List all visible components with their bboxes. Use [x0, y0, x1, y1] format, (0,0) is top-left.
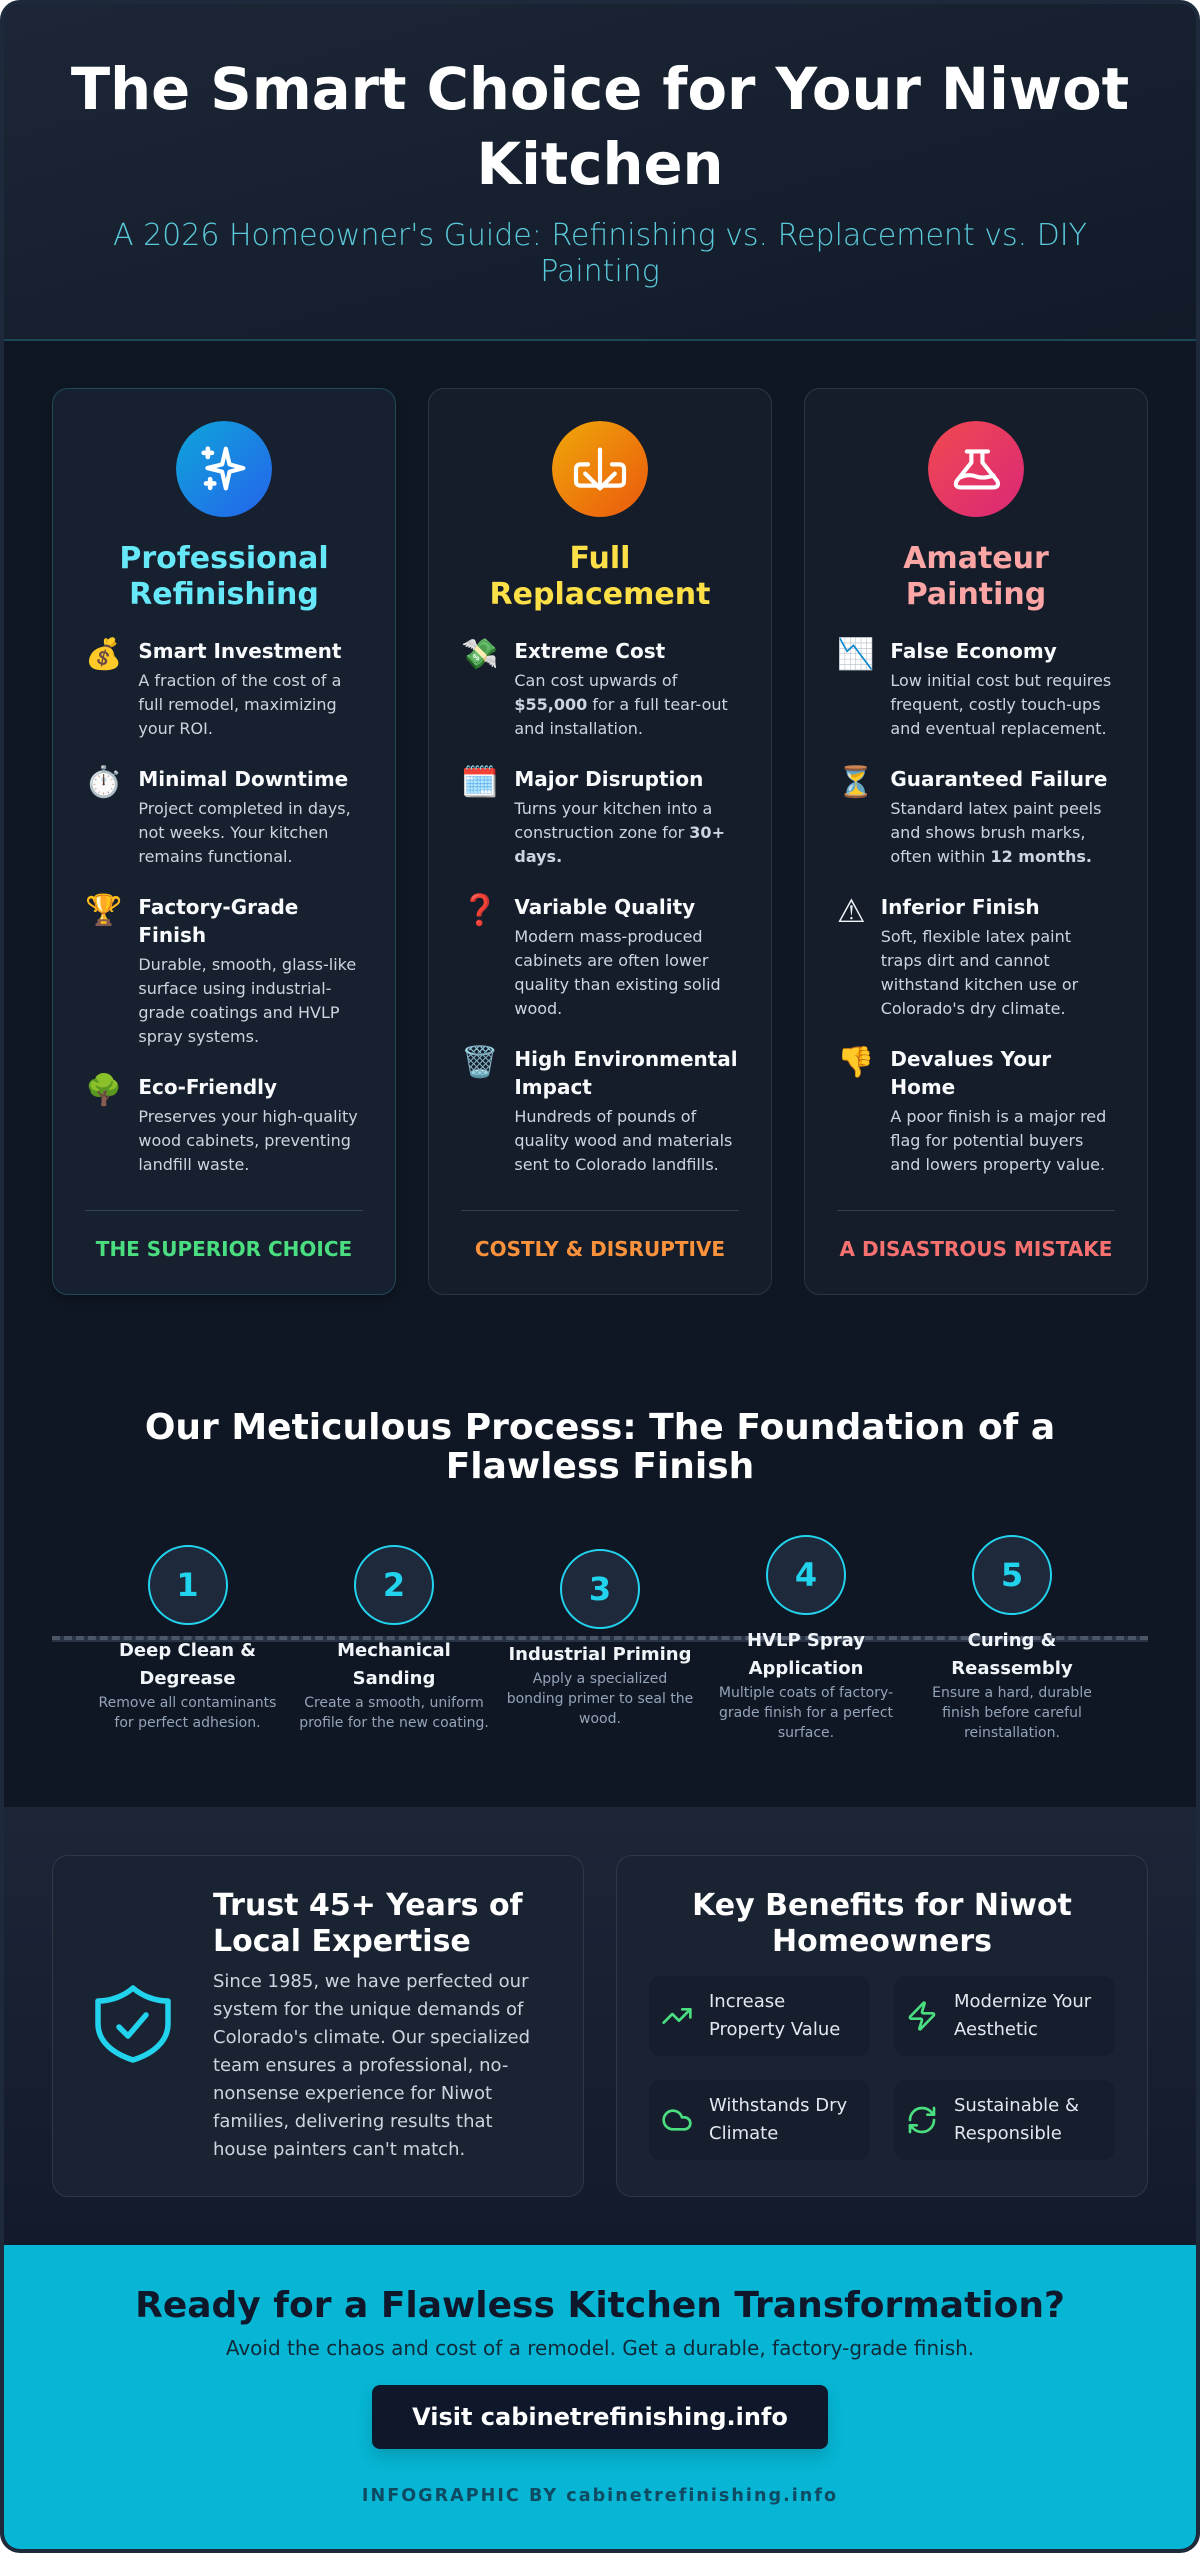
card title: Professional: [119, 541, 329, 576]
card title: Amateur: [903, 541, 1049, 576]
item: false economy: False Economy: [890, 639, 1057, 663]
item: extreme cost: and installation.: [514, 719, 643, 738]
verdict: [461, 1210, 739, 1264]
step text: [507, 1671, 693, 1727]
step number: [766, 1535, 846, 1615]
item: minimal downtime: not weeks. Your kitchen: [138, 823, 328, 842]
step title: Degrease: [139, 1668, 236, 1689]
verdict: COSTLY & DISRUPTIVE: [475, 1237, 725, 1261]
cta subtext: Avoid the chaos and cost of a remodel. Get a durable, factory-grade finish.: [226, 2336, 974, 2360]
step title: Reassembly: [951, 1658, 1073, 1679]
item: inferior finish: Soft, flexible latex paint: [881, 927, 1071, 946]
item: devalues home: Devalues Your: [890, 1047, 1051, 1071]
verdict: [85, 1210, 363, 1264]
item: smart investment: Smart Investment: [138, 639, 341, 663]
benefit: dry climate: Withstands Dry: [709, 2095, 847, 2116]
process heading: Flawless Finish: [446, 1446, 754, 1487]
process heading: [145, 1407, 1055, 1487]
item: major disruption: construction zone for 30+: [514, 823, 725, 842]
step title: [747, 1630, 865, 1679]
step text: Ensure a hard, durable: [932, 1685, 1092, 1701]
item: environmental impact: [461, 1045, 738, 1174]
trust paragraph: [213, 1971, 530, 2160]
trust paragraph: families, delivering results that: [213, 2111, 493, 2132]
step text: [719, 1685, 893, 1741]
benefit: sustainable: [894, 2080, 1115, 2160]
step number: 5: [1001, 1556, 1023, 1594]
item: devalues home: and lowers property value.: [890, 1155, 1105, 1174]
item: guaranteed failure: [837, 765, 1107, 866]
item: inferior finish: Colorado's dry climate.: [881, 999, 1066, 1018]
item: extreme cost: 💸: [461, 637, 498, 672]
item: factory-grade finish: spray systems.: [138, 1027, 259, 1046]
step number: 2: [383, 1566, 405, 1604]
credit: INFOGRAPHIC BY cabinetrefinishing.info: [362, 2486, 838, 2506]
item: variable quality: ❓: [461, 893, 498, 928]
card title: Painting: [906, 577, 1046, 612]
benefit: dry climate: Climate: [709, 2123, 778, 2144]
item: false economy: [837, 637, 1111, 738]
item: factory-grade finish: Finish: [138, 923, 206, 947]
item: extreme cost: Extreme Cost: [514, 639, 665, 663]
trust heading: Local Expertise: [213, 1924, 471, 1959]
item: environmental impact: Impact: [514, 1075, 592, 1099]
item: devalues home: 👎: [837, 1045, 874, 1080]
item: factory-grade finish: Durable, smooth, glass-like: [138, 955, 356, 974]
benefit: sustainable: Sustainable &: [954, 2095, 1079, 2116]
item: variable quality: quality than existing solid: [514, 975, 721, 994]
item: eco-friendly: 🌳: [85, 1073, 122, 1108]
verdict: THE SUPERIOR CHOICE: [96, 1237, 352, 1261]
cta heading: Ready for a Flawless Kitchen Transformation?: [135, 2285, 1065, 2326]
panel: key benefits: [616, 1855, 1148, 2197]
item: minimal downtime: ⏱️: [85, 765, 122, 800]
item: variable quality: wood.: [514, 999, 562, 1018]
benefits heading: [692, 1888, 1072, 1959]
step text: surface.: [778, 1725, 834, 1741]
step title: Sanding: [353, 1668, 435, 1689]
icon: flask: [928, 421, 1024, 517]
card title: [903, 541, 1049, 612]
step 4: [719, 1535, 893, 1741]
item: smart investment: your ROI.: [138, 719, 213, 738]
item: guaranteed failure: often within 12 months.: [890, 847, 1092, 866]
item: extreme cost: $55,000 for a full tear-out: [514, 695, 728, 714]
step text: Remove all contaminants: [99, 1695, 276, 1711]
trust paragraph: Since 1985, we have perfected our: [213, 1971, 528, 1992]
title: [71, 56, 1129, 198]
step text: profile for the new coating.: [299, 1715, 489, 1731]
item: devalues home: [837, 1045, 1106, 1174]
benefit: modernize: [894, 1976, 1115, 2056]
step text: Create a smooth, uniform: [304, 1695, 484, 1711]
step title: Application: [749, 1658, 863, 1679]
item: factory-grade finish: 🏆: [85, 893, 122, 928]
title: The Smart Choice for Your Niwot: [71, 56, 1129, 123]
item: variable quality: Variable Quality: [514, 895, 695, 919]
benefit: property value: [649, 1976, 870, 2056]
step number: 4: [795, 1556, 817, 1594]
item: eco-friendly: wood cabinets, preventing: [138, 1131, 351, 1150]
benefit: sustainable: Responsible: [954, 2123, 1062, 2144]
step title: Industrial Priming: [508, 1644, 692, 1665]
step number: [560, 1549, 640, 1629]
item: false economy: and eventual replacement.: [890, 719, 1107, 738]
icon: shield check: [95, 1985, 171, 2063]
step text: finish before careful: [942, 1705, 1082, 1721]
step number: [148, 1545, 228, 1625]
item: smart investment: A fraction of the cost of a: [138, 671, 341, 690]
item: false economy: Low initial cost but requires: [890, 671, 1111, 690]
step 1: [99, 1545, 276, 1731]
item: major disruption: [461, 765, 725, 866]
item: minimal downtime: Project completed in days,: [138, 799, 351, 818]
step 5: [932, 1535, 1092, 1741]
item: extreme cost: Can cost upwards of: [514, 671, 677, 690]
item: environmental impact: sent to Colorado landfills.: [514, 1155, 719, 1174]
step title: [951, 1630, 1073, 1679]
trust heading: [213, 1888, 523, 1959]
panel: amateur painting: [804, 388, 1148, 1295]
benefit: modernize: Modernize Your: [954, 1991, 1091, 2012]
benefit: dry climate: [649, 2080, 870, 2160]
icon: download into box: [552, 421, 648, 517]
item: eco-friendly: Eco-Friendly: [138, 1075, 277, 1099]
step text: wood.: [579, 1711, 621, 1727]
benefits heading: Homeowners: [772, 1924, 992, 1959]
panel: trust: [52, 1855, 584, 2197]
cta button: Visit cabinetrefinishing.info: [412, 2403, 788, 2431]
panel: full replacement: [428, 388, 772, 1295]
step title: [119, 1640, 256, 1689]
card title: Replacement: [490, 577, 710, 612]
trust and benefits band: [4, 1807, 1196, 2245]
item: inferior finish: Inferior Finish: [881, 895, 1040, 919]
subtitle: [113, 218, 1087, 289]
step number: 1: [176, 1566, 199, 1604]
item: minimal downtime: Minimal Downtime: [138, 767, 348, 791]
step number: 3: [589, 1570, 611, 1608]
item: minimal downtime: [85, 765, 351, 866]
item: variable quality: cabinets are often lower: [514, 951, 708, 970]
step text: Multiple coats of factory-: [719, 1685, 893, 1701]
cta button: [372, 2385, 828, 2449]
step text: Apply a specialized: [533, 1671, 667, 1687]
item: eco-friendly: [85, 1073, 358, 1174]
step text: [99, 1695, 276, 1731]
benefit: property value: Increase: [709, 1991, 785, 2012]
item: extreme cost: [461, 637, 728, 738]
card title: [119, 541, 329, 612]
item: devalues home: Home: [890, 1075, 955, 1099]
trust paragraph: nonsense experience for Niwot: [213, 2083, 492, 2104]
step text: [932, 1685, 1092, 1741]
step text: reinstallation.: [964, 1725, 1060, 1741]
benefit: property value: Property Value: [709, 2019, 840, 2040]
process heading: Our Meticulous Process: The Foundation of a: [145, 1407, 1055, 1448]
call to action band: [4, 2245, 1196, 2549]
trust paragraph: system for the unique demands of: [213, 1999, 523, 2020]
item: false economy: frequent, costly touch-ups: [890, 695, 1101, 714]
card title: Full: [570, 541, 630, 576]
item: smart investment: 💰: [85, 637, 122, 672]
item: environmental impact: Hundreds of pounds of: [514, 1107, 696, 1126]
item: smart investment: full remodel, maximizing: [138, 695, 337, 714]
benefit: modernize: Aesthetic: [954, 2019, 1038, 2040]
item: major disruption: Turns your kitchen into a: [514, 799, 712, 818]
trust paragraph: Colorado's climate. Our specialized: [213, 2027, 530, 2048]
step title: Curing &: [968, 1630, 1056, 1651]
item: false economy: 📉: [837, 637, 874, 672]
item: variable quality: [461, 893, 721, 1018]
step 3: [507, 1549, 693, 1727]
step number: [972, 1535, 1052, 1615]
item: inferior finish: [837, 892, 1078, 1018]
item: devalues home: flag for potential buyers: [890, 1131, 1083, 1150]
step text: bonding primer to seal the: [507, 1691, 693, 1707]
item: factory-grade finish: [85, 893, 356, 1046]
item: major disruption: 🗓️: [461, 765, 498, 800]
trust paragraph: team ensures a professional, no-: [213, 2055, 508, 2076]
item: factory-grade finish: Factory-Grade: [138, 895, 298, 919]
item: guaranteed failure: and shows brush marks,: [890, 823, 1085, 842]
item: smart investment: [85, 637, 341, 738]
card title: [490, 541, 710, 612]
header: [4, 4, 1196, 341]
item: major disruption: days.: [514, 847, 562, 866]
step text: [299, 1695, 489, 1731]
item: eco-friendly: Preserves your high-quality: [138, 1107, 358, 1126]
verdict: [837, 1210, 1115, 1264]
item: eco-friendly: landfill waste.: [138, 1155, 249, 1174]
item: guaranteed failure: ⏳: [837, 765, 874, 800]
step title: Mechanical: [337, 1640, 451, 1661]
item: factory-grade finish: surface using industrial-: [138, 979, 331, 998]
panel: professional refinishing: [52, 388, 396, 1295]
item: environmental impact: 🗑️: [461, 1045, 498, 1080]
process timeline line: [52, 1636, 1148, 1642]
step title: [337, 1640, 451, 1689]
item: inferior finish: traps dirt and cannot: [881, 951, 1050, 970]
trust heading: Trust 45+ Years of: [213, 1888, 523, 1923]
item: major disruption: Major Disruption: [514, 767, 703, 791]
subtitle: Painting: [540, 254, 660, 289]
item: inferior finish: ⚠: [837, 892, 866, 930]
step 2: [299, 1545, 489, 1731]
item: minimal downtime: remains functional.: [138, 847, 293, 866]
item: variable quality: Modern mass-produced: [514, 927, 703, 946]
icon: sparkles: [176, 421, 272, 517]
item: guaranteed failure: Guaranteed Failure: [890, 767, 1107, 791]
item: factory-grade finish: grade coatings and HVLP: [138, 1003, 340, 1022]
step text: grade finish for a perfect: [719, 1705, 893, 1721]
benefits heading: Key Benefits for Niwot: [692, 1888, 1072, 1923]
step text: for perfect adhesion.: [114, 1715, 261, 1731]
item: environmental impact: quality wood and materials: [514, 1131, 732, 1150]
step number: [354, 1545, 434, 1625]
step title: HVLP Spray: [747, 1630, 865, 1651]
item: environmental impact: High Environmental: [514, 1047, 738, 1071]
trust paragraph: house painters can't match.: [213, 2139, 465, 2160]
subtitle: A 2026 Homeowner's Guide: Refinishing vs. Replacement vs. DIY: [113, 218, 1087, 253]
item: guaranteed failure: Standard latex paint peels: [890, 799, 1101, 818]
item: devalues home: A poor finish is a major red: [890, 1107, 1106, 1126]
item: inferior finish: withstand kitchen use or: [881, 975, 1078, 994]
verdict: A DISASTROUS MISTAKE: [840, 1237, 1112, 1261]
card title: Refinishing: [129, 577, 319, 612]
step title: Deep Clean &: [119, 1640, 256, 1661]
title: Kitchen: [476, 131, 724, 198]
